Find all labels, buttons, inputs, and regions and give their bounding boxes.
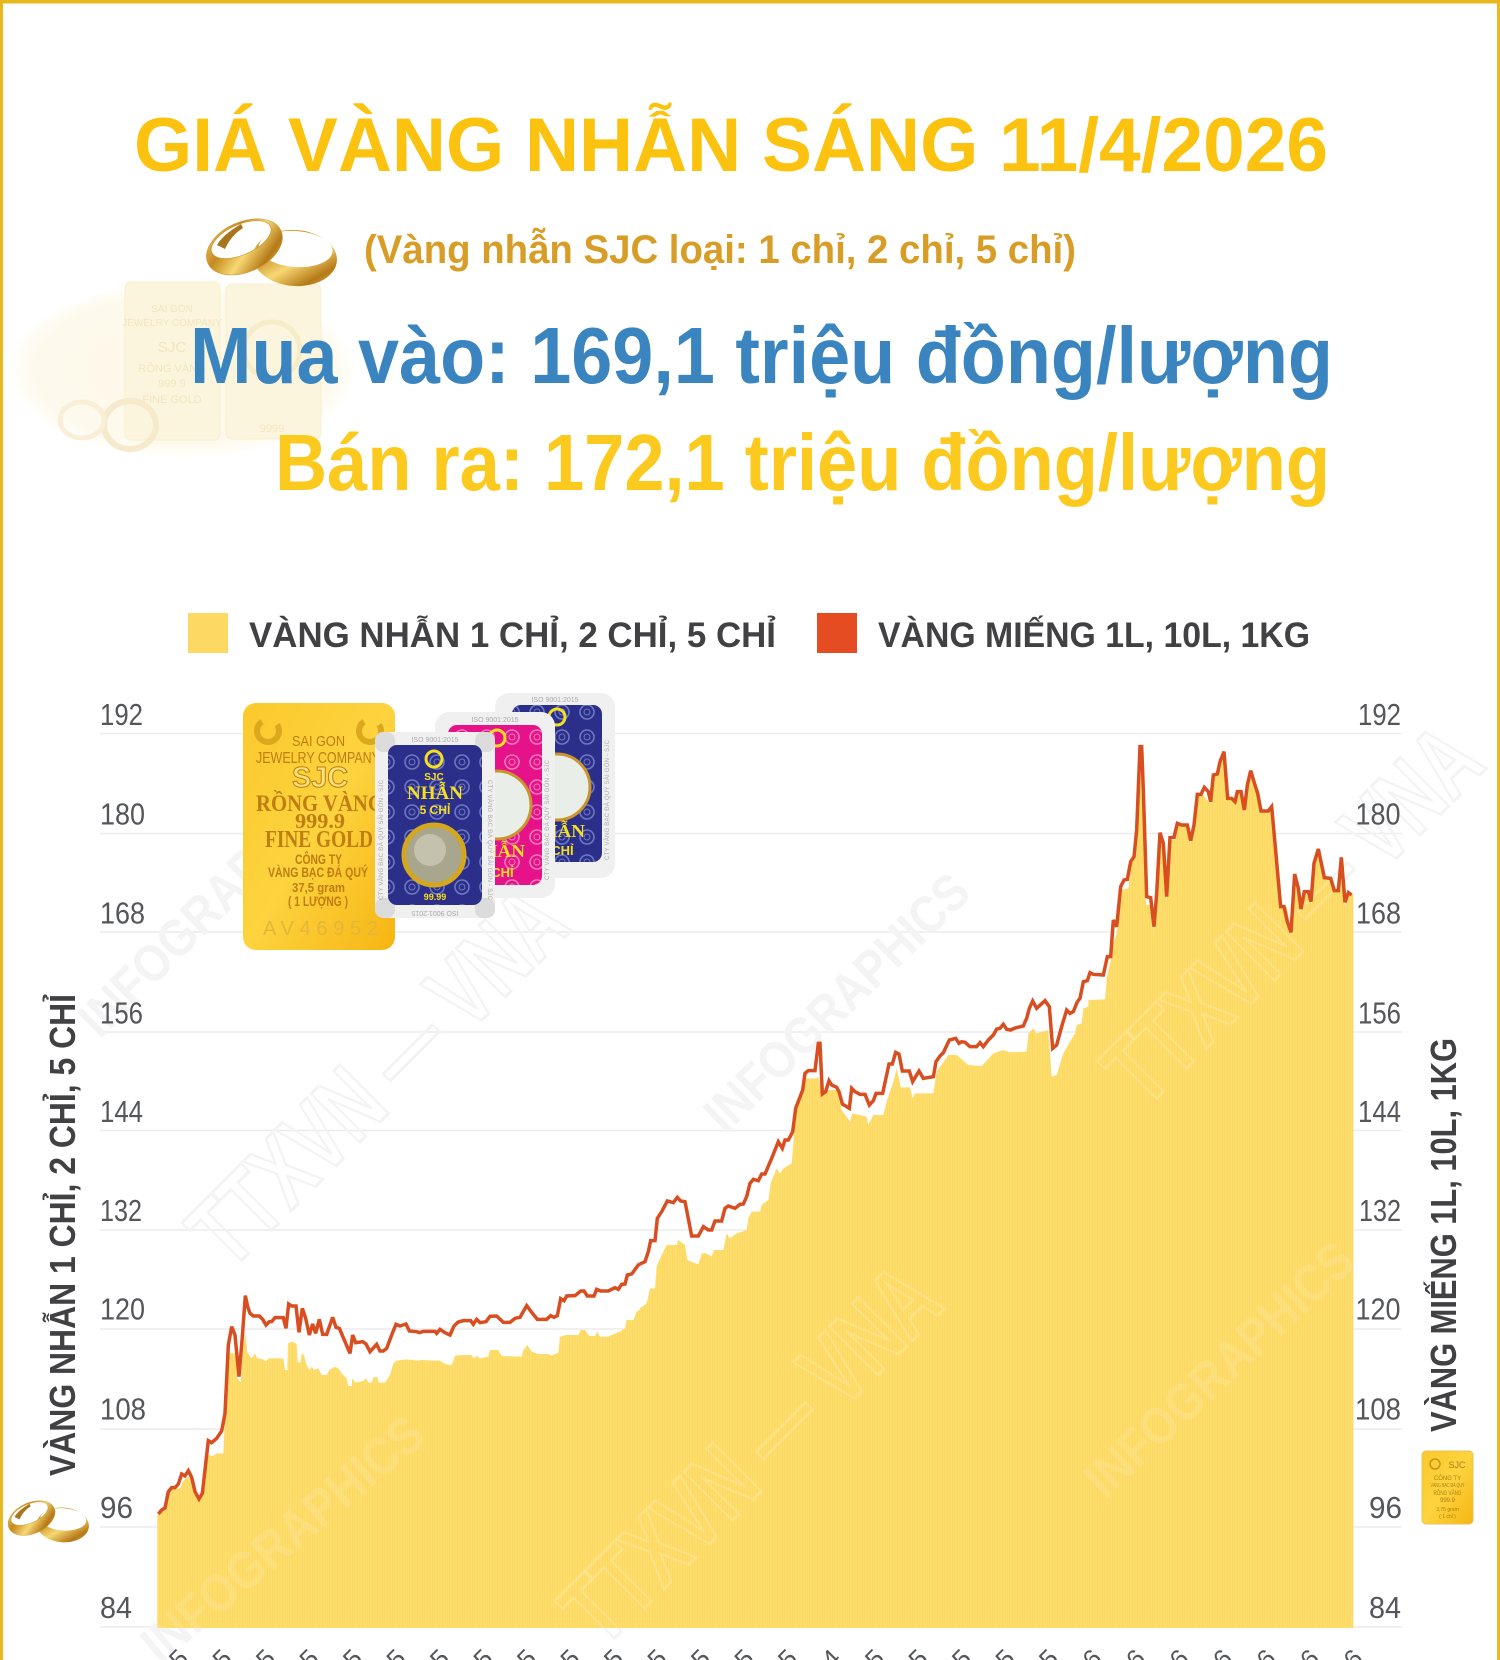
subtitle: (Vàng nhẫn SJC loại: 1 chỉ, 2 chỉ, 5 chỉ) <box>364 226 1076 272</box>
left axis values: 120 <box>100 1292 145 1326</box>
faded background photo: gold bars and rings: 999.9 <box>158 378 186 390</box>
left axis values: 84 <box>100 1590 132 1625</box>
icon: small gold bar by right axis <box>1422 1451 1473 1524</box>
image: SJC gold bar: CÔNG TY <box>295 850 342 867</box>
title: GIÁ VÀNG NHẪN SÁNG 11/4/2026 <box>134 102 1328 188</box>
image: SJC gold bar: ( 1 LƯỢNG ) <box>288 893 348 909</box>
image: ring package, back blue: CTY VÀNG BẠC ĐÁ QUÝ SÀI GÒN - SJC <box>604 739 611 860</box>
watermark on bars: TTXVN — VNA <box>539 1243 962 1660</box>
faded background photo: gold bars and rings: SAI GON <box>151 304 193 315</box>
legend: ring gold swatch <box>188 613 228 653</box>
watermark on white: TTXVN — VNA <box>539 1243 962 1660</box>
right axis values: 180 <box>1356 796 1400 832</box>
image: SJC gold bar: FINE GOLD <box>265 827 373 853</box>
left axis values: 144 <box>100 1094 143 1129</box>
image: ring package, front blue <box>375 732 495 918</box>
left axis values: 192 <box>100 697 143 732</box>
left axis values <box>100 697 146 1625</box>
icon: rings by left axis <box>3 1494 90 1544</box>
image: SJC gold bar: 37,5 gram <box>292 880 345 895</box>
right axis values: 156 <box>1358 996 1401 1030</box>
watermark on white <box>67 703 1500 1660</box>
icon: small gold bar by right axis: SJC <box>1448 1460 1466 1470</box>
watermark on white: INFOGRAPHICS <box>693 862 982 1144</box>
buying price: Mua vào: 169,1 triệu đồng/lượng <box>190 311 1333 400</box>
watermark on white: TTXVN — VNA <box>166 865 589 1288</box>
image: ring package, middle magenta: 2 CHỈ <box>480 865 514 880</box>
left axis values: 108 <box>100 1392 146 1426</box>
image: SJC gold bar: JEWELRY COMPANY <box>256 750 380 767</box>
right axis values: 192 <box>1358 697 1401 732</box>
image: ring package, back blue: ISO 9001:2015 <box>531 697 579 704</box>
icon: small gold bar by right axis: VÀNG BẠC ĐÁ QUÝ <box>1430 1482 1465 1489</box>
image: ring package, back blue: 5 CHỈ <box>540 843 574 858</box>
right axis title: VÀNG MIẾNG 1L, 10L, 1KG <box>1423 1038 1464 1432</box>
image: SJC gold bar <box>243 703 395 950</box>
image: ring package, middle magenta: CTY VÀNG BẠC ĐÁ QUÝ SÀI GÒN - SJC <box>544 759 551 880</box>
legend: bar gold swatch <box>817 613 857 653</box>
left axis values: 156 <box>100 996 143 1030</box>
watermark on white: INFOGRAPHICS <box>67 760 356 1048</box>
faded background photo: gold bars and rings <box>10 282 354 457</box>
faded background photo: gold bars and rings: 9999 <box>260 423 284 435</box>
image: SJC gold bar: VÀNG BẠC ĐÁ QUÝ <box>268 863 368 880</box>
left axis title: VÀNG NHẪN 1 CHỈ, 2 CHỈ, 5 CHỈ <box>41 994 83 1476</box>
image: ring package, front blue: ISO 9001:2015 <box>411 737 459 744</box>
legend: bar gold label: VÀNG MIẾNG 1L, 10L, 1KG <box>878 615 1310 655</box>
legend <box>188 613 1310 655</box>
icon: small gold bar by right axis: RỒNG VÀNG <box>1434 1490 1462 1497</box>
ring gold bars <box>157 700 1354 1628</box>
right axis values: 132 <box>1359 1193 1401 1228</box>
image: SJC gold bar: RỒNG VÀNG <box>256 790 384 816</box>
image: SJC gold bar: 999.9 <box>295 809 345 833</box>
right axis values <box>1355 697 1402 1625</box>
image: ring package, front blue: SJC <box>424 772 444 783</box>
x axis dates <box>126 1643 1369 1660</box>
left axis values: 180 <box>100 796 145 832</box>
image: ring package, middle magenta: ISO 9001:2015 <box>471 717 519 724</box>
image: SJC gold bar: SAI GON <box>292 733 345 750</box>
faded background photo: gold bars and rings: SJC <box>158 339 186 356</box>
image: ring package, middle magenta <box>435 712 555 898</box>
right axis values: 120 <box>1356 1292 1400 1326</box>
image: ring package, back blue <box>495 693 615 878</box>
image: ring package, front blue: 99.99 <box>424 892 446 902</box>
image: ring package, front blue: NHẪN <box>407 782 463 804</box>
right axis values: 108 <box>1355 1392 1401 1426</box>
faded background photo: gold bars and rings: RỒNG VÀNG <box>138 362 206 375</box>
left axis values: 168 <box>100 896 145 930</box>
legend: ring gold label: VÀNG NHẪN 1 CHỈ, 2 CHỈ, 5 CHỈ <box>249 615 776 655</box>
image: ring package, middle magenta: NHẪN <box>469 840 525 861</box>
right axis values: 144 <box>1358 1094 1401 1129</box>
image: ring package, front blue: CTY VÀNG BẠC ĐÁ QUÝ SÀI GÒN - SJC <box>378 779 385 900</box>
image: ring package, back blue: NHẪN <box>529 820 585 841</box>
watermark on bars <box>130 703 1500 1660</box>
icon: small gold bar by right axis: 3,75 gram <box>1436 1507 1459 1513</box>
image: ring package, front blue: CTY VÀNG BẠC ĐÁ QUÝ SÀI GÒN - SJC <box>486 780 493 901</box>
right axis values: 168 <box>1356 896 1401 930</box>
left axis values: 132 <box>100 1193 142 1228</box>
faded background photo: gold bars and rings: FINE GOLD <box>142 394 202 406</box>
watermark on bars: INFOGRAPHICS <box>1074 1231 1366 1509</box>
icon: small gold bar by right axis: CÔNG TY <box>1434 1475 1461 1482</box>
chart: gold price <box>67 697 1500 1660</box>
image: ring package, front blue: 5 CHỈ <box>420 802 451 817</box>
image: SJC gold bar: SJC <box>292 762 348 794</box>
image: ring package, front blue: ISO 9001:2015 <box>411 909 459 916</box>
right axis values: 84 <box>1369 1590 1401 1625</box>
image: SJC gold bar: AV46952 <box>263 918 378 940</box>
faded background photo: gold bars and rings: JEWELRY COMPANY <box>122 318 222 329</box>
icon: wedding rings <box>198 208 339 289</box>
bar gold line <box>158 747 1352 1514</box>
icon: small gold bar by right axis: 999.9 <box>1440 1498 1456 1504</box>
selling price: Bán ra: 172,1 triệu đồng/lượng <box>275 418 1330 507</box>
right axis values: 96 <box>1369 1490 1402 1525</box>
icon: small gold bar by right axis: ( 1 chỉ ) <box>1439 1513 1456 1520</box>
left axis values: 96 <box>100 1490 133 1525</box>
